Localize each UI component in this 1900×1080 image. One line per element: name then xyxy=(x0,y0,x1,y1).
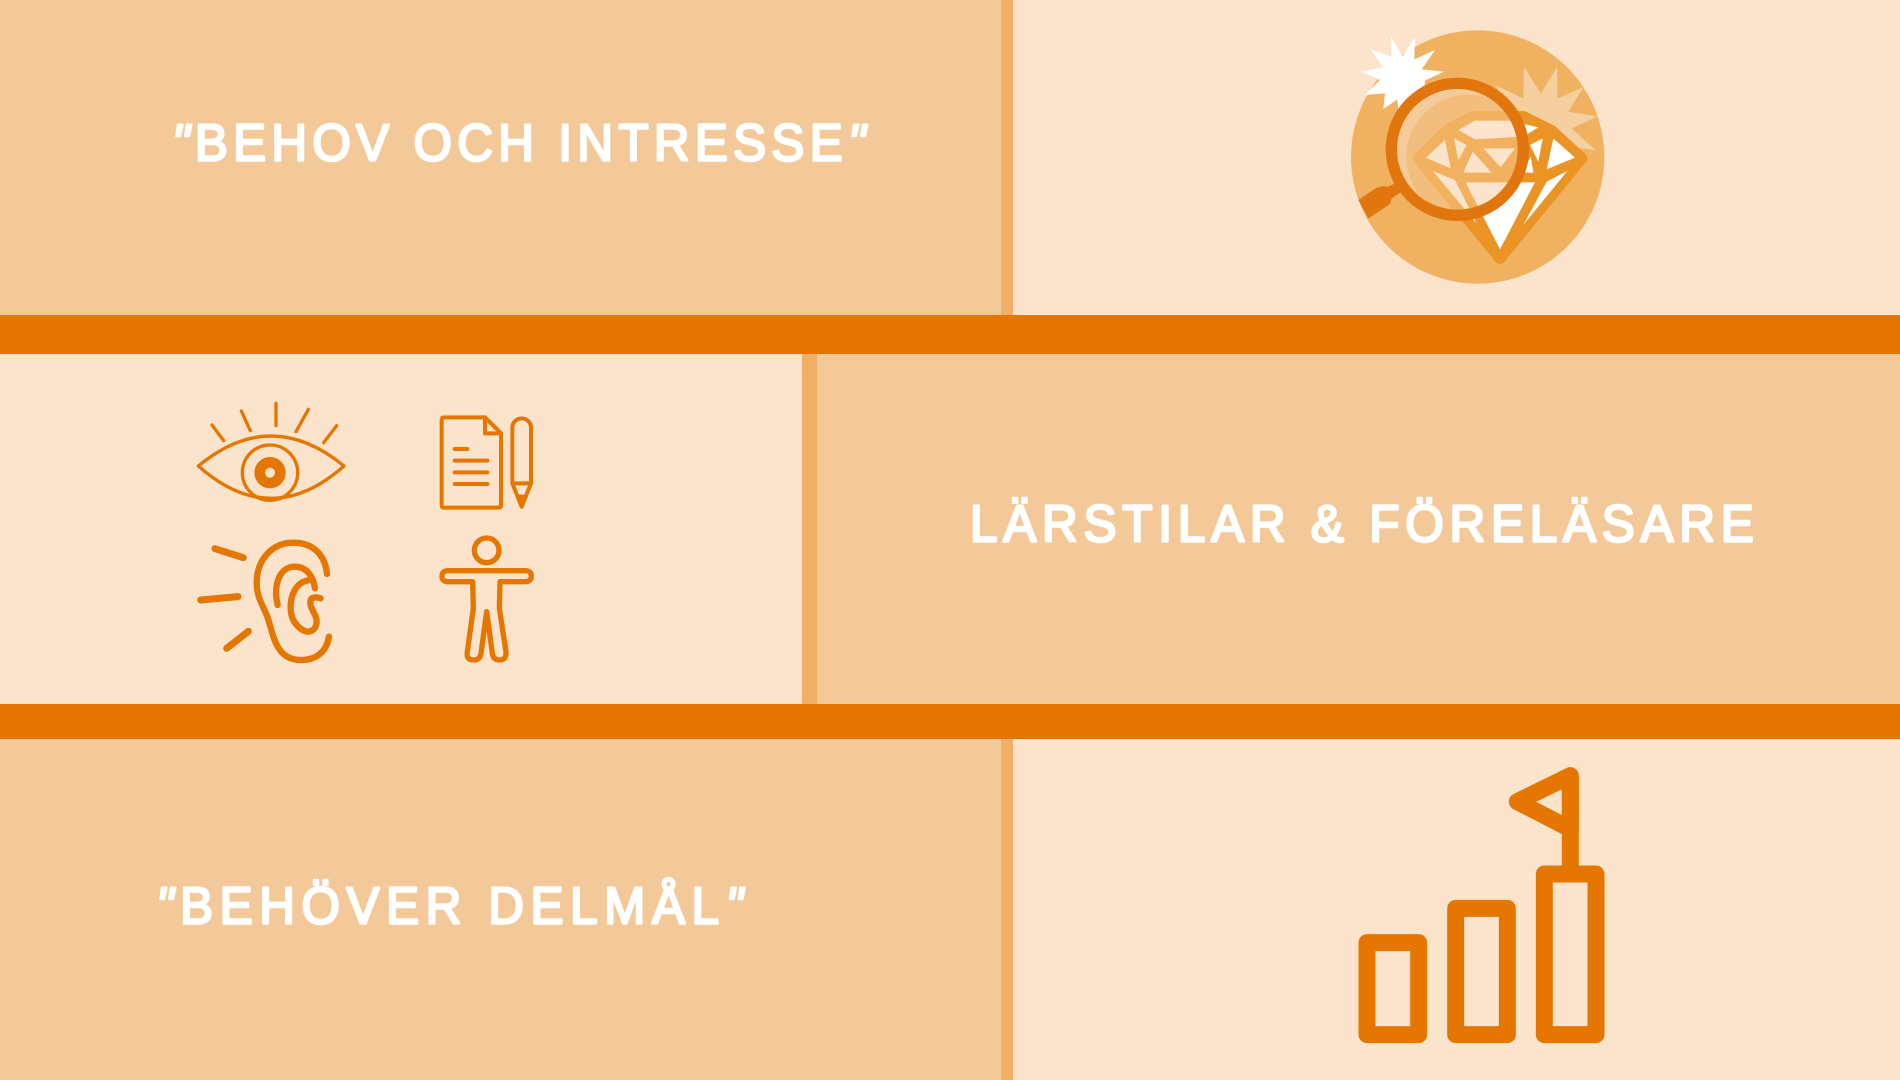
icon: ear xyxy=(201,543,329,660)
icon: human figure xyxy=(442,538,531,660)
heading: behov och intresse: "BEHOV OCH INTRESSE" xyxy=(172,113,867,172)
panel: middle left xyxy=(0,354,802,704)
panel: top left xyxy=(0,0,1001,315)
icon: diamond under magnifying glass xyxy=(1351,30,1604,284)
panel: bottom left xyxy=(0,739,1001,1080)
panel: bottom right xyxy=(1013,739,1900,1080)
panel: top right xyxy=(1013,0,1900,315)
icon: eye xyxy=(198,403,344,500)
icon: rising bars with flag xyxy=(1367,776,1596,1035)
panel: middle right xyxy=(817,354,1900,704)
heading: lärstilar och föreläsare: LÄRSTILAR & FÖRELÄSARE xyxy=(970,494,1754,553)
heading: behöver delmål: "BEHÖVER DELMÅL" xyxy=(156,876,745,935)
icon: document and pencil xyxy=(442,417,531,508)
